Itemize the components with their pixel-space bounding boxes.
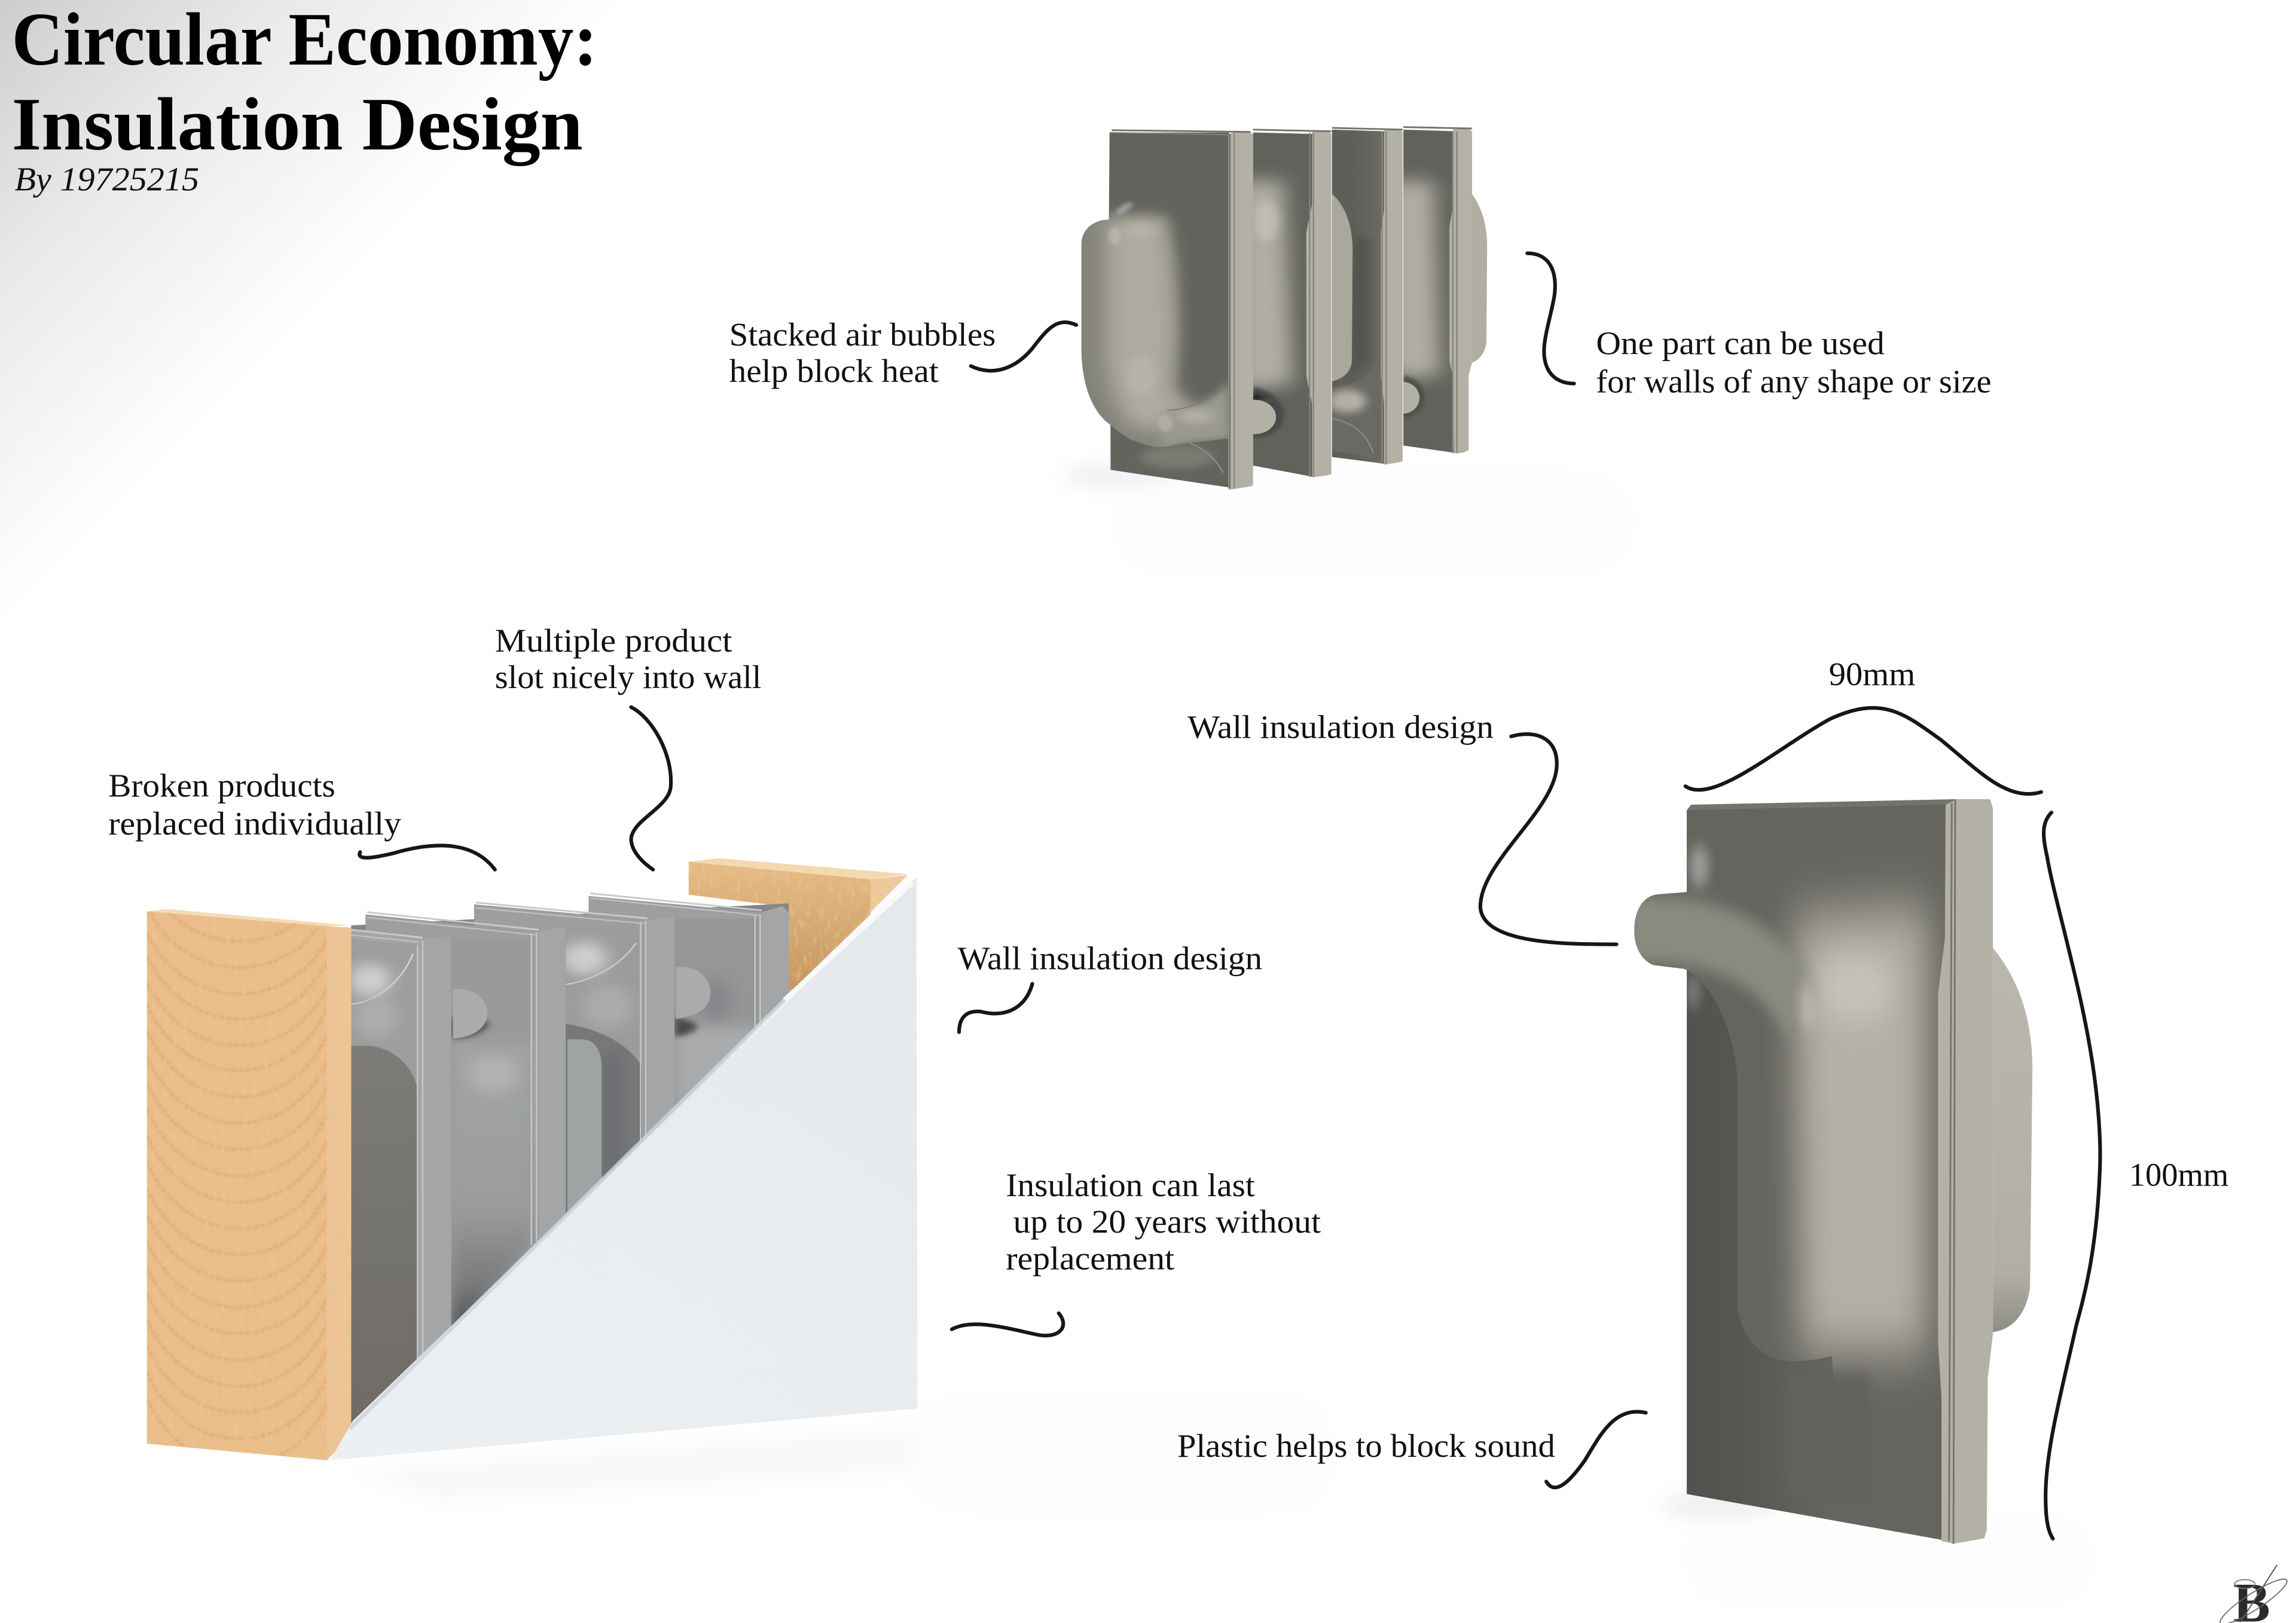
label: wall insulation design, cutaway: Wall insulation design — [958, 940, 1262, 976]
label: wall insulation design, large part: Wall insulation design — [1187, 708, 1494, 745]
dimension curve: 90mm — [1686, 708, 2041, 794]
plate 2 — [1253, 129, 1332, 477]
label: insulation lifetime — [1006, 1167, 1321, 1276]
leader: multiple product — [631, 707, 671, 870]
rear bubble — [1993, 948, 2032, 1332]
label: stacked air bubbles: help block heat — [729, 353, 939, 389]
label: plastic sound: Plastic helps to block sound — [1177, 1428, 1555, 1464]
label: insulation lifetime: Insulation can last — [1006, 1167, 1255, 1203]
plate 4, rear — [1403, 126, 1488, 453]
plate 1, front with air bubble — [1074, 130, 1253, 490]
plate 3 — [1329, 128, 1403, 464]
label: broken products — [108, 767, 401, 842]
leader: wall insulation right — [1480, 734, 1617, 945]
product render: stacked insulation parts — [1074, 127, 1487, 490]
label: insulation lifetime: replacement — [1006, 1240, 1174, 1276]
label: one part: for walls of any shape or size — [1596, 363, 1992, 399]
title — [12, 0, 597, 166]
insulation plate D — [588, 893, 789, 1106]
label: broken products: Broken products — [108, 767, 335, 803]
author line: By 19725215 — [14, 161, 199, 198]
label: one part: One part can be used — [1596, 325, 1885, 362]
label: stacked air bubbles — [729, 316, 996, 389]
insulation plate B — [365, 911, 566, 1326]
label: multiple product — [495, 622, 761, 695]
leader: stacked air bubbles — [971, 322, 1076, 371]
large single insulation part — [1629, 799, 2032, 1546]
title: Circular Economy: — [12, 0, 597, 81]
insulation cavity — [351, 903, 789, 1434]
leader: plastic sound — [1546, 1412, 1646, 1487]
side band — [1938, 799, 1993, 1544]
label: 90mm: 90mm — [1829, 656, 1915, 692]
logo: monogram B — [2216, 1565, 2291, 1623]
label: one part — [1596, 325, 1992, 399]
label: broken products: replaced individually — [108, 805, 401, 842]
white wall panel — [330, 877, 919, 1461]
front face — [1629, 799, 1957, 1546]
back wooden stud — [689, 858, 908, 998]
left wooden stud — [147, 882, 353, 1465]
label: insulation lifetime: up to 20 years without — [1013, 1203, 1321, 1240]
leader: broken products — [359, 846, 495, 870]
floor shadows and reflections — [352, 464, 2080, 1588]
leader: insulation lifetime — [952, 1313, 1063, 1335]
leader lines and dimension curves — [359, 253, 2100, 1539]
leader: wall insulation left — [959, 984, 1033, 1032]
cutaway wall render — [147, 858, 919, 1465]
label: stacked air bubbles: Stacked air bubbles — [729, 316, 996, 353]
insulation plate C — [474, 901, 674, 1213]
leader: one part — [1527, 253, 1574, 384]
edge lines — [1949, 800, 1955, 1544]
label: multiple product: slot nicely into wall — [495, 659, 761, 695]
title: Insulation Design — [12, 83, 583, 166]
insulation plate A — [349, 930, 451, 1434]
label: 100mm: 100mm — [2129, 1157, 2228, 1193]
label: multiple product: Multiple product — [495, 622, 732, 659]
dimension curve: 100mm — [2044, 812, 2100, 1539]
